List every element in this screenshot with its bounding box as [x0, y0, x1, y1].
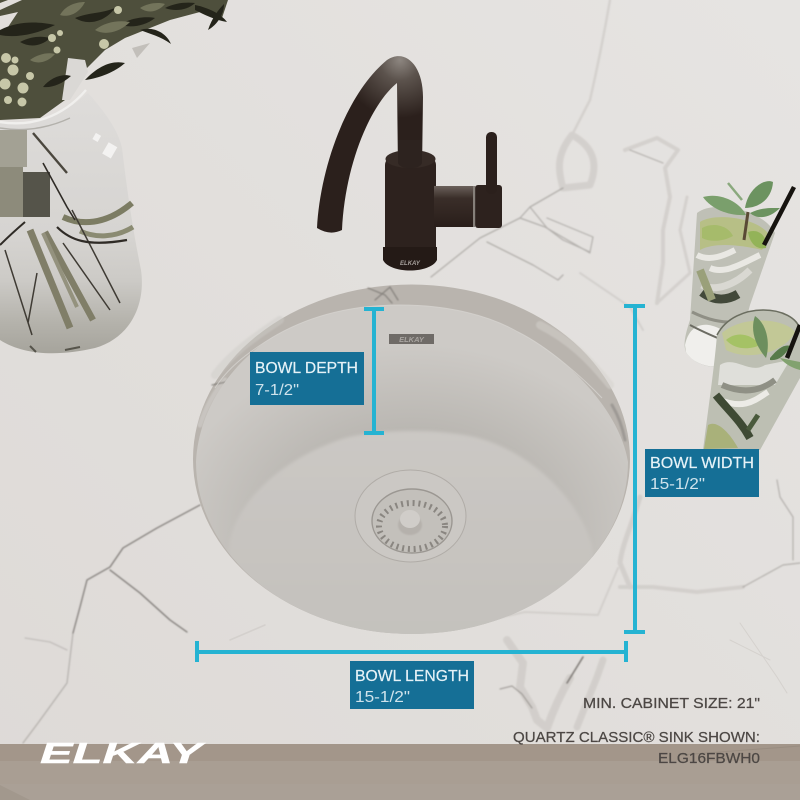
bowl top lip highlight — [215, 305, 602, 398]
front mint leaves — [753, 316, 768, 358]
spout — [317, 56, 423, 233]
depth label: 7-1/2" — [255, 382, 299, 399]
rim marble veining — [200, 287, 625, 440]
spec note: cabinet and model: QUARTZ CLASSIC® SINK SHOWN: — [513, 729, 760, 746]
depth label — [250, 352, 364, 405]
stems in water — [0, 130, 133, 352]
width label: 15-1/2" — [650, 476, 705, 493]
width label — [645, 449, 759, 497]
depth label: BOWL DEPTH — [255, 360, 358, 377]
sink — [190, 284, 635, 645]
back glass — [685, 181, 794, 367]
back straw — [764, 187, 794, 245]
wide pale veins — [498, 0, 743, 728]
front straw — [787, 325, 800, 358]
mojito glasses — [685, 181, 800, 450]
spec note: cabinet and model: ELG16FBWH0 — [658, 750, 760, 767]
vase with greenery — [0, 0, 228, 353]
sink rim — [193, 284, 630, 634]
width arrow — [624, 306, 645, 632]
spec note: cabinet and model: MIN. CABINET SIZE: 21" — [583, 695, 760, 712]
faucet: ELKAY — [400, 261, 421, 267]
length arrow — [197, 641, 626, 662]
faint veins — [230, 623, 787, 693]
vase glass — [0, 93, 142, 353]
sink logo plate: ELKAY — [399, 335, 425, 344]
faucet body — [385, 152, 436, 252]
fine grey veins — [431, 150, 800, 587]
dimension: bowl depth — [250, 309, 384, 433]
faucet — [317, 56, 502, 270]
foliage — [0, 0, 228, 120]
dimension: bowl length — [197, 641, 626, 709]
length label — [350, 661, 474, 709]
back glass contents — [700, 217, 770, 250]
depth arrow — [364, 309, 384, 433]
bowl wall and floor — [190, 300, 635, 645]
spec note: cabinet and model — [513, 695, 760, 767]
dark vein left — [23, 505, 583, 743]
back mint leaves — [745, 181, 773, 208]
front glass contents — [722, 320, 795, 355]
length label: 15-1/2" — [355, 689, 410, 706]
wood edge strip — [0, 744, 800, 800]
faucet handle — [434, 186, 473, 227]
front glass — [703, 310, 800, 450]
faucet base — [383, 247, 437, 270]
Elkay logo: ELKAY — [40, 738, 206, 770]
width label: BOWL WIDTH — [650, 455, 754, 472]
sink logo plate — [389, 334, 434, 344]
length label: BOWL LENGTH — [355, 668, 469, 685]
dimension: bowl width — [624, 306, 759, 632]
drain — [355, 470, 466, 562]
